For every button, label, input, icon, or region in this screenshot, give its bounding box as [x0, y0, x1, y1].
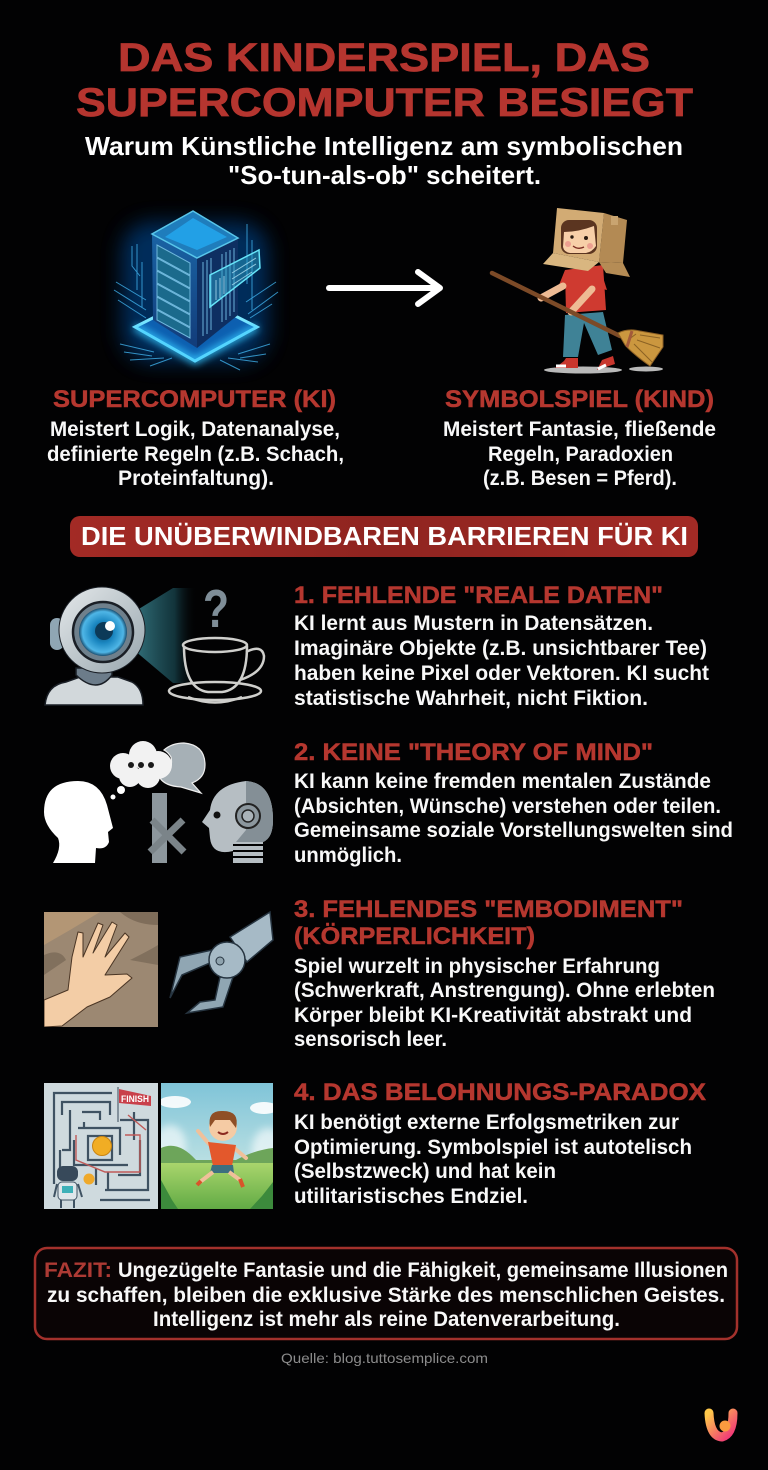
image: robot maze with reward coin: FINISH	[121, 1094, 149, 1104]
section banner: DIE UNÜBERWINDBAREN BARRIEREN FÜR KI	[81, 521, 688, 551]
shoes	[555, 358, 578, 368]
image: robot maze with reward coin	[44, 1083, 158, 1209]
text block 4: Optimierung. Symbolspiel ist autotelisch	[294, 1136, 692, 1159]
description: definierte Regeln (z.B. Schach,	[47, 443, 344, 466]
text block 1: KI lernt aus Mustern in Datensätzen.	[294, 612, 653, 635]
description: (z.B. Besen = Pferd).	[483, 467, 677, 490]
question mark: ?	[203, 579, 229, 639]
heading 4: 4. DAS BELOHNUNGS-PARADOX	[294, 1079, 706, 1106]
eye	[79, 608, 127, 656]
heading 3: (KÖRPERLICHKEIT)	[294, 923, 535, 950]
title	[76, 36, 693, 125]
callout: conclusion: zu schaffen, bleiben die exklusive Stärke des menschlichen Geistes.	[47, 1284, 725, 1307]
thought cloud	[110, 741, 172, 788]
subtitle	[85, 131, 683, 190]
description	[47, 418, 344, 490]
icon: robot looking at invisible tea	[45, 579, 264, 705]
ear	[50, 618, 64, 650]
data panel	[210, 250, 260, 307]
speech bubble	[160, 743, 205, 793]
robot head	[59, 587, 145, 673]
robot	[57, 1166, 78, 1181]
coin	[92, 1136, 112, 1156]
text block 2: KI kann keine fremden mentalen Zustände	[294, 770, 711, 793]
robot shoulders	[45, 677, 143, 705]
callout: conclusion: FAZIT:	[44, 1259, 112, 1282]
text block 3	[294, 955, 715, 1051]
right column: symbolic play text	[443, 386, 716, 490]
text block 1: Imaginäre Objekte (z.B. unsichtbarer Tee)	[294, 637, 707, 660]
source line: Quelle: blog.tuttosemplice.com	[281, 1350, 488, 1366]
broom head	[618, 330, 663, 366]
text block 3: sensorisch leer.	[294, 1028, 447, 1051]
heading: SUPERCOMPUTER (KI)	[53, 386, 336, 413]
text block 3: Spiel wurzelt in physischer Erfahrung	[294, 955, 660, 978]
text block 2: Gemeinsame soziale Vorstellungswelten sind	[294, 819, 733, 842]
icon: glowing supercomputer server	[114, 211, 278, 370]
heading 2: 2. KEINE "THEORY OF MIND"	[294, 739, 653, 766]
arms	[541, 286, 563, 298]
tower	[152, 234, 197, 348]
text block 4: (Selbstzweck) und hat kein	[294, 1160, 556, 1183]
finish flag	[117, 1087, 119, 1122]
left column: supercomputer text	[47, 386, 344, 490]
callout: conclusion	[35, 1248, 737, 1339]
heading 3	[294, 896, 683, 950]
section banner	[70, 516, 698, 557]
callout: conclusion: Ungezügelte Fantasie und die Fähigkeit, gemeinsame Illusionen	[118, 1259, 728, 1282]
shirt	[565, 265, 606, 313]
subtitle: Warum Künstliche Intelligenz am symbolischen	[85, 131, 683, 161]
description: Regeln, Paradoxien	[488, 443, 673, 466]
icon: robotic gripper	[170, 912, 273, 1013]
heading 3: 3. FEHLENDES "EMBODIMENT"	[294, 896, 683, 923]
heading 1: 1. FEHLENDE "REALE DATEN"	[294, 582, 663, 609]
callout: conclusion: Intelligenz ist mehr als reine Datenverarbeitung.	[153, 1308, 620, 1331]
face	[561, 220, 597, 254]
text block 3: (Schwerkraft, Anstrengung). Ohne erlebten	[294, 979, 715, 1002]
icon: human and robot theory of mind	[44, 741, 273, 863]
text block 4: KI benötigt externe Erfolgsmetriken zur	[294, 1111, 679, 1134]
description: Meistert Logik, Datenanalyse,	[50, 418, 340, 441]
subtitle: "So-tun-als-ob" scheitert.	[228, 160, 541, 190]
image: happy child running on meadow	[161, 1083, 273, 1209]
child	[198, 1131, 246, 1158]
text block 2	[294, 770, 733, 867]
description: Meistert Fantasie, fließende	[443, 418, 716, 441]
arrow	[329, 272, 440, 304]
text block 4	[294, 1111, 692, 1208]
text block 1: statistische Wahrheit, nicht Fiktion.	[294, 687, 648, 710]
text block 3: Körper bleibt KI-Kreativität abstrakt und	[294, 1004, 692, 1027]
cup	[184, 646, 247, 692]
icon: child with cardboard box head and broom	[492, 208, 663, 374]
text block 4: utilitaristisches Endziel.	[294, 1185, 528, 1208]
jeans	[563, 312, 612, 357]
icon: brand logo	[709, 1413, 733, 1437]
description	[443, 418, 716, 490]
scan beam	[108, 588, 197, 683]
heading: SYMBOLSPIEL (KIND)	[445, 386, 714, 413]
pillar and cross	[152, 793, 167, 863]
text block 2: unmöglich.	[294, 844, 402, 867]
image: human hand on earth	[44, 912, 158, 1027]
text block 1	[294, 612, 709, 710]
robot head profile	[202, 781, 273, 863]
broom handle	[492, 273, 620, 336]
text block 1: haben keine Pixel oder Vektoren. KI sucht	[294, 662, 709, 685]
human head	[44, 781, 113, 863]
description: Proteinfaltung).	[118, 467, 274, 490]
title: DAS KINDERSPIEL, DAS	[118, 36, 650, 80]
text block 2: (Absichten, Wünsche) verstehen oder teilen.	[294, 795, 721, 818]
box	[599, 213, 627, 263]
platform	[135, 296, 257, 361]
title: SUPERCOMPUTER BESIEGT	[76, 81, 693, 125]
